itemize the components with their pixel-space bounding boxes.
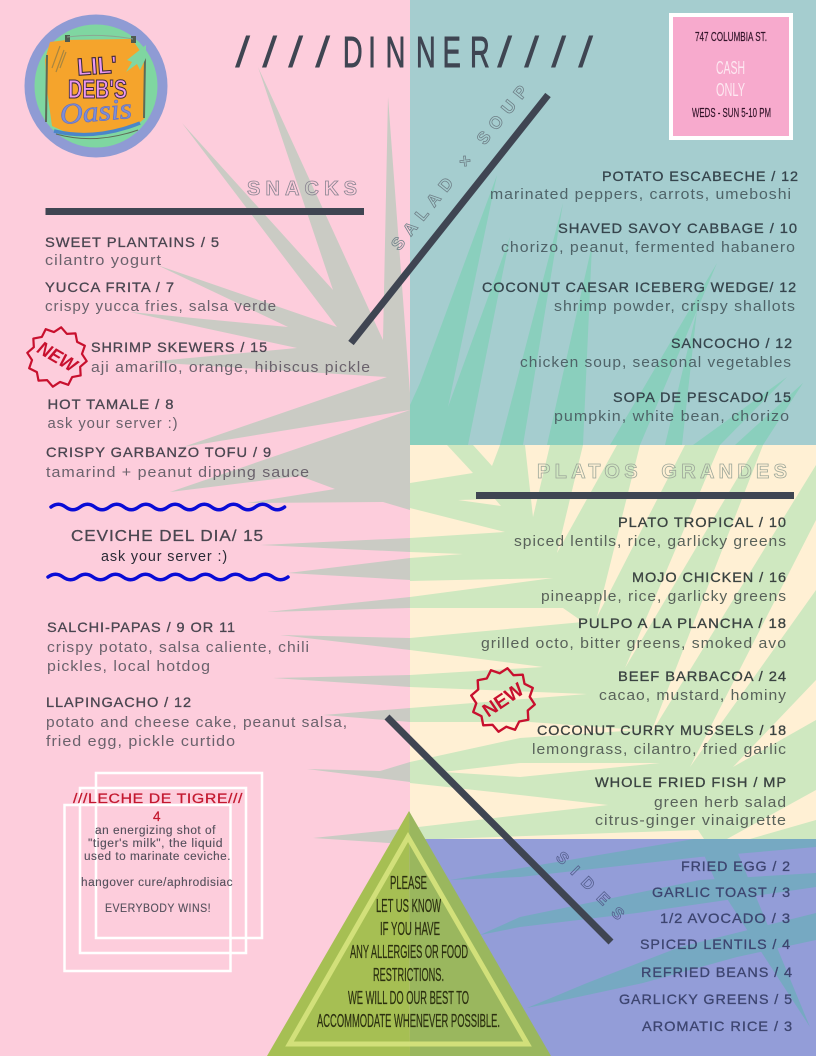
menu: snacks: cilantro yogurt (45, 253, 162, 269)
badge: new shrimp skewers: NEW (33, 338, 82, 378)
menu: snacks: crispy potato, salsa caliente, chili (47, 640, 310, 656)
logo wordmark: DEB'S (68, 74, 127, 104)
menu: sides: SPICED LENTILS / 4 (640, 936, 791, 952)
menu: platos grandes: green herb salad (654, 795, 787, 811)
menu: salad and soup: chicken soup, seasonal vegetables (520, 355, 792, 371)
panel: cream background (410, 445, 816, 839)
menu: platos grandes: pineapple, rice, garlicky greens (541, 589, 787, 605)
menu: snacks (45, 234, 371, 750)
diagonal bar: salad and soup (351, 95, 548, 343)
menu: salad and soup: pumpkin, white bean, chorizo (554, 409, 790, 425)
callout: allergy triangle: WE WILL DO OUR BEST TO (348, 988, 469, 1008)
callout: allergy triangle: ANY ALLERGIES OR FOOD (350, 942, 468, 962)
divider bar: platos grandes (476, 492, 794, 499)
callout: leche de tigre: hangover cure/aphrodisiac (81, 877, 233, 889)
heading: snacks: SNACKS (247, 178, 357, 200)
menu: salad and soup: COCONUT CAESAR ICEBERG WEDGE/ 12 (482, 279, 797, 295)
menu: sides: GARLIC TOAST / 3 (652, 884, 791, 900)
menu: snacks: fried egg, pickle curtido (46, 734, 236, 750)
badge: new beef barbacoa: NEW (479, 679, 529, 722)
palm leaf: gray fronds on pink (130, 67, 420, 845)
logo wordmark (59, 52, 133, 131)
title: DINNER (343, 27, 490, 77)
logo wordmark: Oasis (59, 93, 133, 131)
menu: snacks: SHRIMP SKEWERS / 15 (91, 339, 268, 355)
menu: salad and soup: chorizo, peanut, fermented habanero (501, 240, 796, 256)
callout: leche de tigre: ///LECHE DE TIGRE/// (73, 791, 243, 806)
menu: platos grandes: cacao, mustard, hominy (599, 688, 787, 704)
menu: platos grandes: PULPO A LA PLANCHA / 18 (578, 615, 787, 631)
callout: allergy triangle: LET US KNOW (376, 896, 441, 916)
info box: address, cash only, hours: ONLY (716, 80, 745, 100)
menu: snacks: aji amarillo, orange, hibiscus pickle (91, 360, 371, 376)
menu: platos grandes: MOJO CHICKEN / 16 (632, 569, 787, 585)
menu: snacks: crispy yucca fries, salsa verde (45, 299, 277, 315)
menu: sides: FRIED EGG / 2 (681, 858, 791, 874)
menu: snacks: pickles, local hotdog (47, 659, 211, 675)
menu: snacks: tamarind + peanut dipping sauce (46, 465, 310, 481)
menu: platos grandes: PLATO TROPICAL / 10 (618, 514, 787, 530)
wavy line: below ceviche (48, 574, 288, 580)
callout: allergy triangle: IF YOU HAVE (380, 919, 440, 939)
menu: sides: REFRIED BEANS / 4 (641, 964, 793, 980)
menu: snacks: YUCCA FRITA / 7 (45, 279, 175, 295)
menu: snacks: ask your server :) (48, 416, 178, 432)
panel: pink background (0, 0, 410, 1056)
callout: ceviche del dia: CEVICHE DEL DIA/ 15 (71, 528, 264, 545)
badge: new beef barbacoa (467, 664, 539, 736)
menu: sides: 1/2 AVOCADO / 3 (660, 910, 791, 926)
palm leaf: teal fronds (410, 175, 803, 445)
title (235, 27, 593, 77)
callout: leche de tigre: an energizing shot of (95, 825, 216, 837)
menu: platos grandes (481, 514, 787, 829)
panel: teal background (410, 0, 816, 445)
menu: snacks: HOT TAMALE / 8 (48, 396, 174, 412)
callout: leche de tigre: EVERYBODY WINS! (105, 903, 211, 915)
badge: new shrimp skewers (23, 323, 91, 391)
menu: platos grandes: WHOLE FRIED FISH / MP (595, 774, 787, 790)
title: //// (497, 27, 593, 77)
menu: salad and soup: SOPA DE PESCADO/ 15 (613, 389, 792, 405)
diagonal bar: sides (387, 717, 611, 942)
callout: ceviche del dia: ask your server :) (101, 549, 228, 565)
palm leaf: blue-green fronds (450, 838, 816, 1027)
heading: salad and soup: SALAD × SOUP (387, 82, 532, 254)
menu: sides (619, 858, 793, 1034)
menu: snacks: SALCHI-PAPAS / 9 OR 11 (47, 619, 236, 635)
menu: salad and soup: SHAVED SAVOY CABBAGE / 10 (558, 220, 798, 236)
logo: Lil' Deb's Oasis (24, 14, 168, 158)
divider bar: snacks (46, 208, 364, 215)
callout: leche de tigre: 4 (153, 809, 161, 824)
info box: address, cash only, hours (671, 15, 791, 138)
callout: ceviche del dia (71, 528, 264, 565)
heading: sides: SIDES (552, 849, 627, 924)
callout: leche de tigre: used to marinate ceviche. (84, 851, 231, 863)
menu: snacks: CRISPY GARBANZO TOFU / 9 (46, 444, 272, 460)
menu: snacks: potato and cheese cake, peanut salsa, (46, 715, 348, 731)
menu: platos grandes: BEEF BARBACOA / 24 (618, 668, 787, 684)
callout: leche de tigre: "tiger's milk", the liquid (88, 838, 223, 850)
menu: snacks: LLAPINGACHO / 12 (46, 694, 192, 710)
callout: leche de tigre (64, 773, 262, 971)
logo wordmark: LIL' (76, 52, 118, 81)
menu: sides: AROMATIC RICE / 3 (642, 1018, 793, 1034)
wavy line: above ceviche (51, 504, 285, 510)
callout: allergy triangle: RESTRICTIONS. (373, 965, 444, 985)
menu: salad and soup: SANCOCHO / 12 (671, 335, 793, 351)
info box: address, cash only, hours: 747 COLUMBIA ST. (695, 29, 767, 44)
menu: salad and soup (482, 168, 799, 425)
menu: sides: GARLICKY GREENS / 5 (619, 991, 793, 1007)
menu: platos grandes: lemongrass, cilantro, fried garlic (532, 742, 787, 758)
title: //// (235, 27, 330, 77)
menu: platos grandes: grilled octo, bitter greens, smoked avo (481, 636, 787, 652)
panel: periwinkle background (410, 839, 816, 1056)
heading: platos grandes: PLATOS GRANDES (537, 461, 787, 483)
info box: address, cash only, hours: CASH (716, 58, 745, 78)
callout: allergy triangle: PLEASE (390, 873, 427, 893)
menu: salad and soup: shrimp powder, crispy shallots (554, 299, 796, 315)
menu: platos grandes: citrus-ginger vinaigrette (595, 813, 787, 829)
menu: snacks: SWEET PLANTAINS / 5 (45, 234, 220, 250)
menu: platos grandes: spiced lentils, rice, garlicky greens (514, 534, 787, 550)
callout: allergy triangle (267, 811, 551, 1056)
menu: salad and soup: marinated peppers, carrots, umeboshi (490, 187, 792, 203)
menu: salad and soup: POTATO ESCABECHE / 12 (602, 168, 799, 184)
menu: platos grandes: COCONUT CURRY MUSSELS / 18 (537, 722, 787, 738)
palm leaf: cream gaps between green fronds (410, 445, 816, 839)
callout: allergy triangle: ACCOMMODATE WHENEVER POSSIBLE. (317, 1011, 500, 1031)
